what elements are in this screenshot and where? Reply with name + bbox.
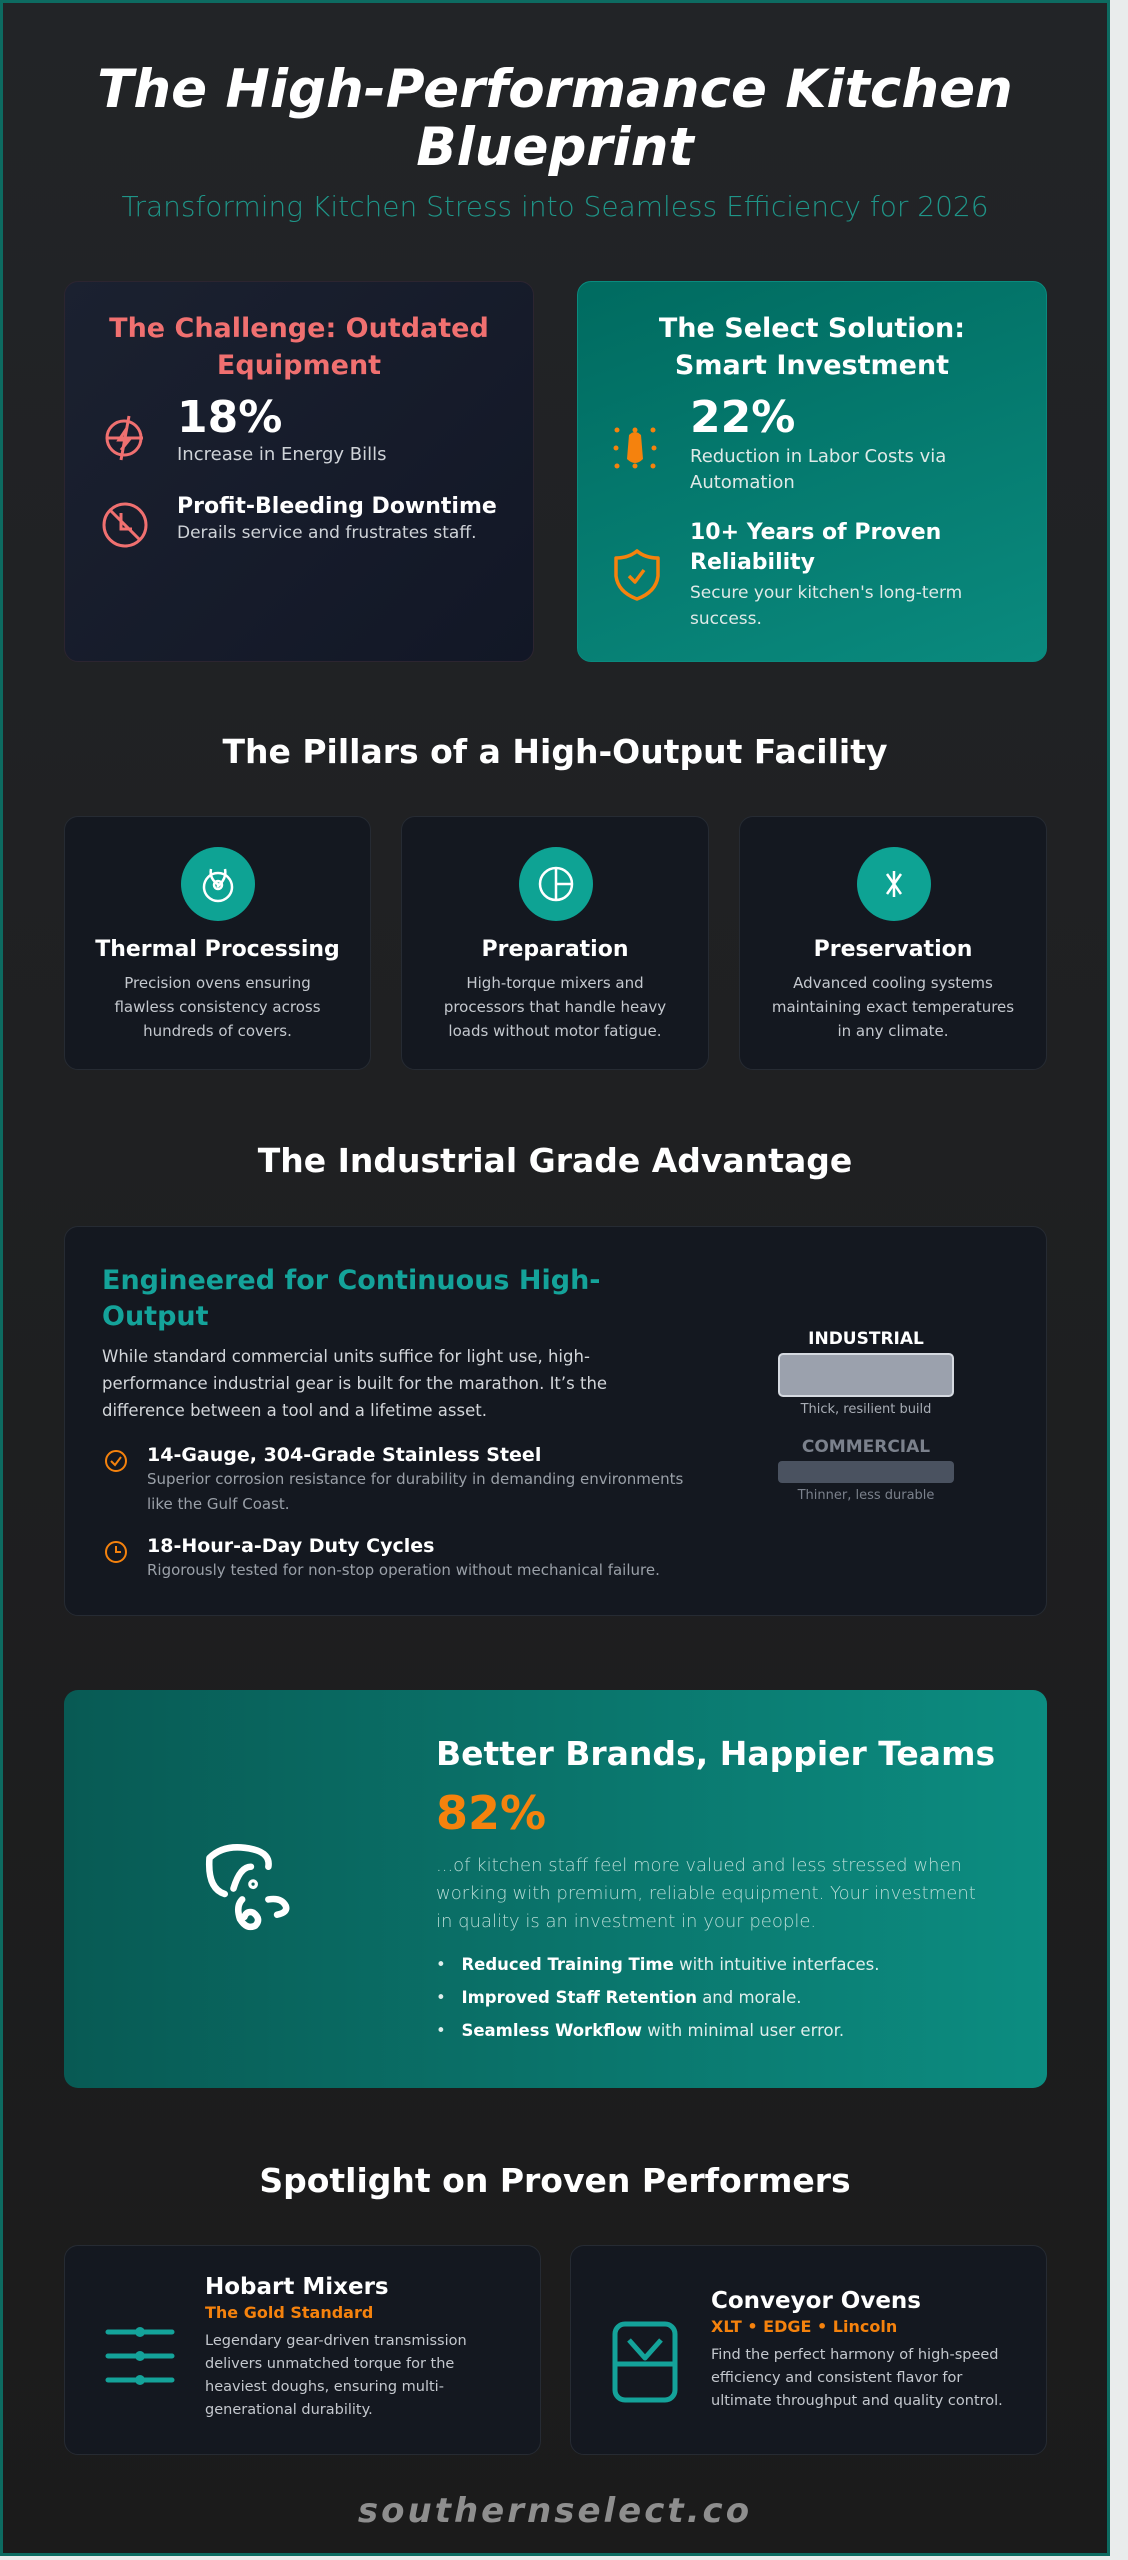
conveyor text [711, 2288, 1003, 2409]
benefit list: • Improved Staff Retention and morale. [436, 1988, 802, 2007]
title: Blueprint [416, 117, 694, 178]
subtitle: Transforming Kitchen Stress into Seamless Efficiency for 2026 [121, 190, 989, 223]
happier heading: Better Brands, Happier Teams [436, 1734, 995, 1773]
preservation text: Preservation [814, 937, 972, 962]
reliability text: success. [690, 609, 762, 629]
preservation text [772, 937, 1014, 1040]
challenge heading: Equipment [217, 350, 381, 381]
solution heading: The Select Solution: [659, 313, 965, 344]
preservation text: Advanced cooling systems [793, 974, 993, 992]
heading: spotlight: Spotlight on Proven Performers [259, 2161, 851, 2200]
heading: pillars: The Pillars of a High-Output Facility [222, 732, 888, 771]
preparation text [444, 937, 666, 1040]
hobart text: generational durability. [205, 2402, 373, 2418]
solution heading [659, 313, 965, 381]
paragraph: performance industrial gear is built for the marathon. It’s the [102, 1374, 607, 1393]
icon: thermal [181, 847, 255, 921]
icon: shield [614, 549, 660, 601]
conveyor text: ultimate throughput and quality control. [711, 2393, 1003, 2409]
preparation text: processors that handle heavy [444, 998, 666, 1016]
preservation text: in any climate. [837, 1022, 949, 1040]
icon: team [206, 1844, 290, 1930]
comparison chart: Thick, resilient build [801, 1402, 931, 1417]
stat 18% [177, 392, 386, 465]
panel: preparation [401, 816, 709, 1070]
hobart text: The Gold Standard [205, 2303, 373, 2322]
icon: sliders [106, 2327, 174, 2385]
title: The High-Performance Kitchen [97, 59, 1013, 120]
conveyor text: Conveyor Ovens [711, 2288, 921, 2314]
icon: oven [612, 2322, 678, 2402]
comparison chart: Thinner, less durable [798, 1488, 934, 1503]
hobart text [205, 2274, 467, 2418]
paragraph [102, 1347, 607, 1420]
engineered heading: Engineered for Continuous High- [102, 1265, 600, 1296]
feature: duty cycles [105, 1535, 660, 1579]
reliability text [690, 520, 962, 629]
preparation text: Preparation [481, 937, 629, 962]
feature: steel: Superior corrosion resistance for durability in demanding environments [147, 1470, 683, 1488]
footer: southernselect.co [358, 2491, 752, 2531]
stat 18%: 18% [177, 392, 282, 443]
downtime text: Derails service and frustrates staff. [177, 523, 476, 543]
conveyor text: XLT • EDGE • Lincoln [711, 2317, 897, 2336]
paragraph: ...of kitchen staff feel more valued and less stressed when [436, 1855, 962, 1876]
preservation text: maintaining exact temperatures [772, 998, 1014, 1016]
thermal text: hundreds of covers. [143, 1022, 292, 1040]
paragraph: difference between a tool and a lifetime asset. [102, 1401, 487, 1420]
stat 22%: Automation [690, 472, 795, 493]
stat 22%: 22% [690, 392, 795, 443]
benefit list [436, 1955, 880, 2040]
conveyor text: Find the perfect harmony of high-speed [711, 2347, 998, 2363]
thermal text: flawless consistency across [114, 998, 321, 1016]
comparison chart [778, 1329, 954, 1503]
engineered heading: Output [102, 1301, 209, 1332]
benefit list: • Reduced Training Time with intuitive interfaces. [436, 1955, 880, 1974]
feature: steel: 14-Gauge, 304-Grade Stainless Steel [147, 1444, 541, 1466]
icon: preservation [857, 847, 931, 921]
stat 18%: Increase in Energy Bills [177, 444, 386, 465]
icon: preparation [519, 847, 593, 921]
thermal text [95, 937, 340, 1040]
reliability text: Secure your kitchen's long-term [690, 583, 962, 603]
hobart text: delivers unmatched torque for the [205, 2356, 454, 2372]
preparation text: High-torque mixers and [466, 974, 644, 992]
challenge heading [109, 313, 489, 381]
stat 22% [690, 392, 946, 493]
solution heading: Smart Investment [675, 350, 949, 381]
panel: happier teams [64, 1690, 1047, 2088]
paragraph: While standard commercial units suffice for light use, high- [102, 1347, 590, 1366]
reliability text: Reliability [690, 550, 815, 575]
paragraph [436, 1855, 976, 1932]
panel: thermal [64, 816, 371, 1070]
thermal text: Thermal Processing [95, 937, 340, 962]
panel: industrial advantage [64, 1226, 1047, 1616]
hobart text: Hobart Mixers [205, 2274, 389, 2300]
comparison chart: COMMERCIAL [802, 1437, 930, 1457]
feature: duty cycles: 18-Hour-a-Day Duty Cycles [147, 1535, 434, 1557]
comparison chart: INDUSTRIAL [808, 1329, 924, 1349]
downtime text: Profit-Bleeding Downtime [177, 494, 497, 519]
stat 82%: 82% [436, 1786, 546, 1840]
stat 22%: Reduction in Labor Costs via [690, 446, 946, 467]
engineered heading [102, 1265, 600, 1332]
benefit list: • Seamless Workflow with minimal user error. [436, 2021, 844, 2040]
preparation text: loads without motor fatigue. [448, 1022, 662, 1040]
challenge heading: The Challenge: Outdated [109, 313, 489, 344]
icon: automation [614, 428, 656, 468]
thermal text: Precision ovens ensuring [124, 974, 311, 992]
reliability text: 10+ Years of Proven [690, 520, 941, 545]
panel: challenge [64, 281, 534, 662]
panel: preservation [739, 816, 1047, 1070]
icon: downtime [102, 502, 148, 548]
panel: hobart [64, 2245, 541, 2455]
panel: conveyor [570, 2245, 1047, 2455]
conveyor text: efficiency and consistent flavor for [711, 2370, 962, 2386]
feature: steel [105, 1444, 683, 1513]
panel: solution [577, 281, 1047, 662]
title [97, 59, 1013, 178]
feature: duty cycles: Rigorously tested for non-stop operation without mechanical failure. [147, 1561, 660, 1579]
hobart text: heaviest doughs, ensuring multi- [205, 2379, 444, 2395]
heading: industrial: The Industrial Grade Advantage [258, 1141, 852, 1180]
paragraph: in quality is an investment in your people. [436, 1911, 816, 1932]
paragraph: working with premium, reliable equipment. Your investment [436, 1883, 976, 1904]
icon: energy [106, 416, 143, 460]
downtime text [177, 494, 497, 543]
feature: steel: like the Gulf Coast. [147, 1495, 290, 1513]
hobart text: Legendary gear-driven transmission [205, 2333, 467, 2349]
